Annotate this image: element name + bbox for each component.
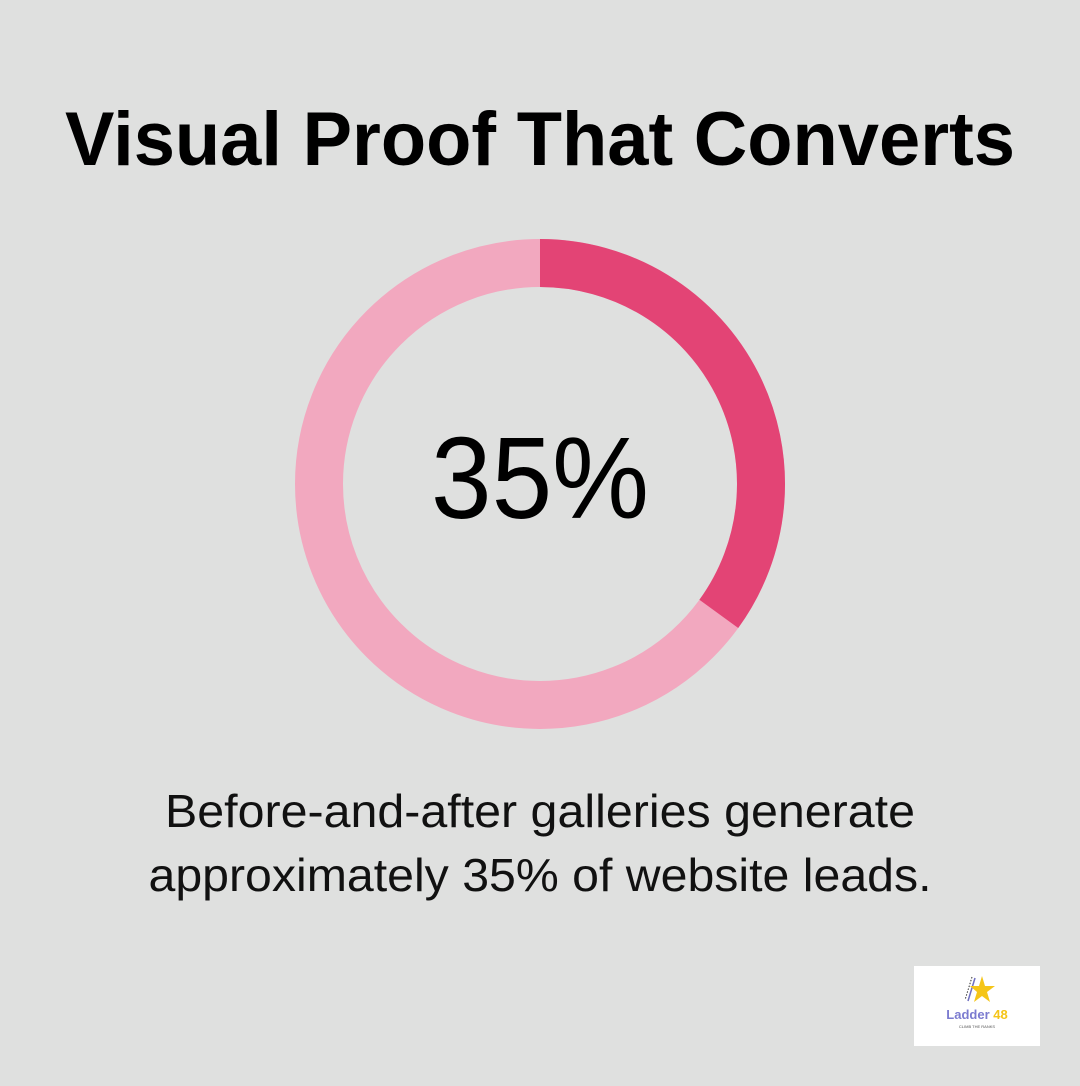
title: Visual Proof That Converts [65, 97, 1015, 182]
center value: 35% [431, 413, 649, 543]
donut chart [319, 263, 761, 705]
caption text [148, 785, 932, 901]
donut segment: 35% [540, 263, 761, 614]
caption text: Before-and-after galleries generate [165, 785, 915, 837]
caption text: approximately 35% of website leads. [148, 849, 932, 901]
logo: Ladder 48: CLIMB THE RANKS [959, 1024, 995, 1029]
icon: ladder and star [965, 976, 995, 1002]
logo: Ladder 48: Ladder 48 [946, 1007, 1008, 1022]
logo: Ladder 48 [914, 966, 1040, 1046]
